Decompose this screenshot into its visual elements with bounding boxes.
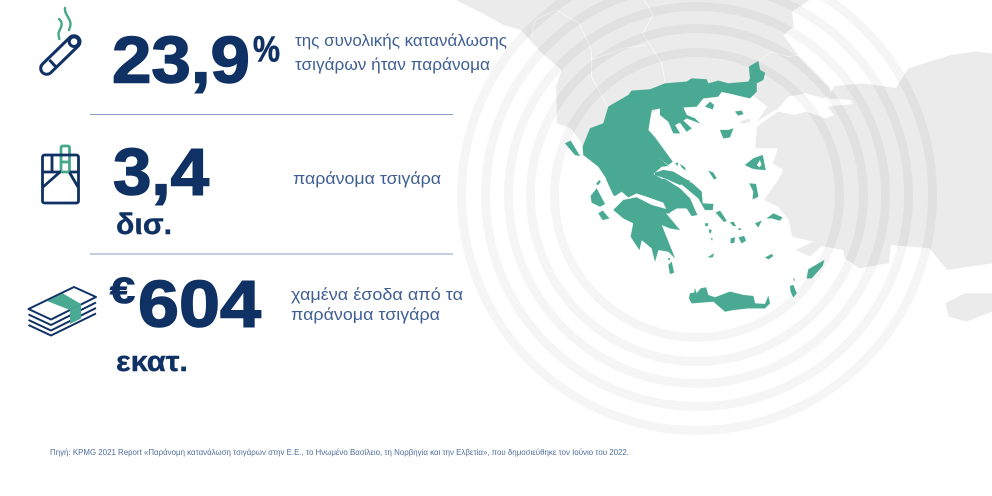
statistic: €604 εκατ.: εκατ. — [116, 346, 188, 378]
text: lost revenue: παράνομα τσιγάρα — [291, 305, 440, 324]
statistic: €604 εκατ. — [110, 266, 261, 378]
background map of neighbouring land — [456, 0, 992, 322]
statistic: 23,9%: 23,9 — [112, 22, 250, 96]
text: lost revenue — [291, 285, 463, 324]
text: share of consumption: τσιγάρων ήταν παράνομα — [295, 55, 490, 74]
statistic: €604 εκατ.: 604 — [138, 266, 261, 340]
statistic: 23,9%: % — [253, 28, 280, 70]
icon: cigarette pack — [42, 146, 78, 203]
concentric radar rings — [462, 0, 932, 430]
text: lost revenue: χαμένα έσοδα από τα — [291, 285, 463, 304]
icon: stack of banknotes — [28, 287, 96, 336]
source note: Πηγή: KPMG 2021 Report «Παράνομη κατανάλωση τσιγάρων στην Ε.Ε., το Ηνωμένο Βασίλειο, τη Νορβηγία και την Ελβετία», που δημοσιεύθηκε τον Ιούνιο του 2022. — [50, 447, 629, 457]
statistic: 3,4 δισ.: 3,4 — [113, 134, 209, 208]
statistic: €604 εκατ.: € — [110, 270, 135, 311]
map of Greece — [565, 61, 824, 312]
statistic: 3,4 δισ. — [113, 134, 209, 241]
text: share of consumption — [295, 31, 507, 74]
statistic: 3,4 δισ.: δισ. — [116, 208, 172, 241]
text: illegal cigarettes: παράνομα τσιγάρα — [293, 169, 441, 188]
icon: cigarette with smoke — [47, 8, 79, 68]
text: share of consumption: της συνολικής κατανάλωσης — [295, 31, 507, 50]
